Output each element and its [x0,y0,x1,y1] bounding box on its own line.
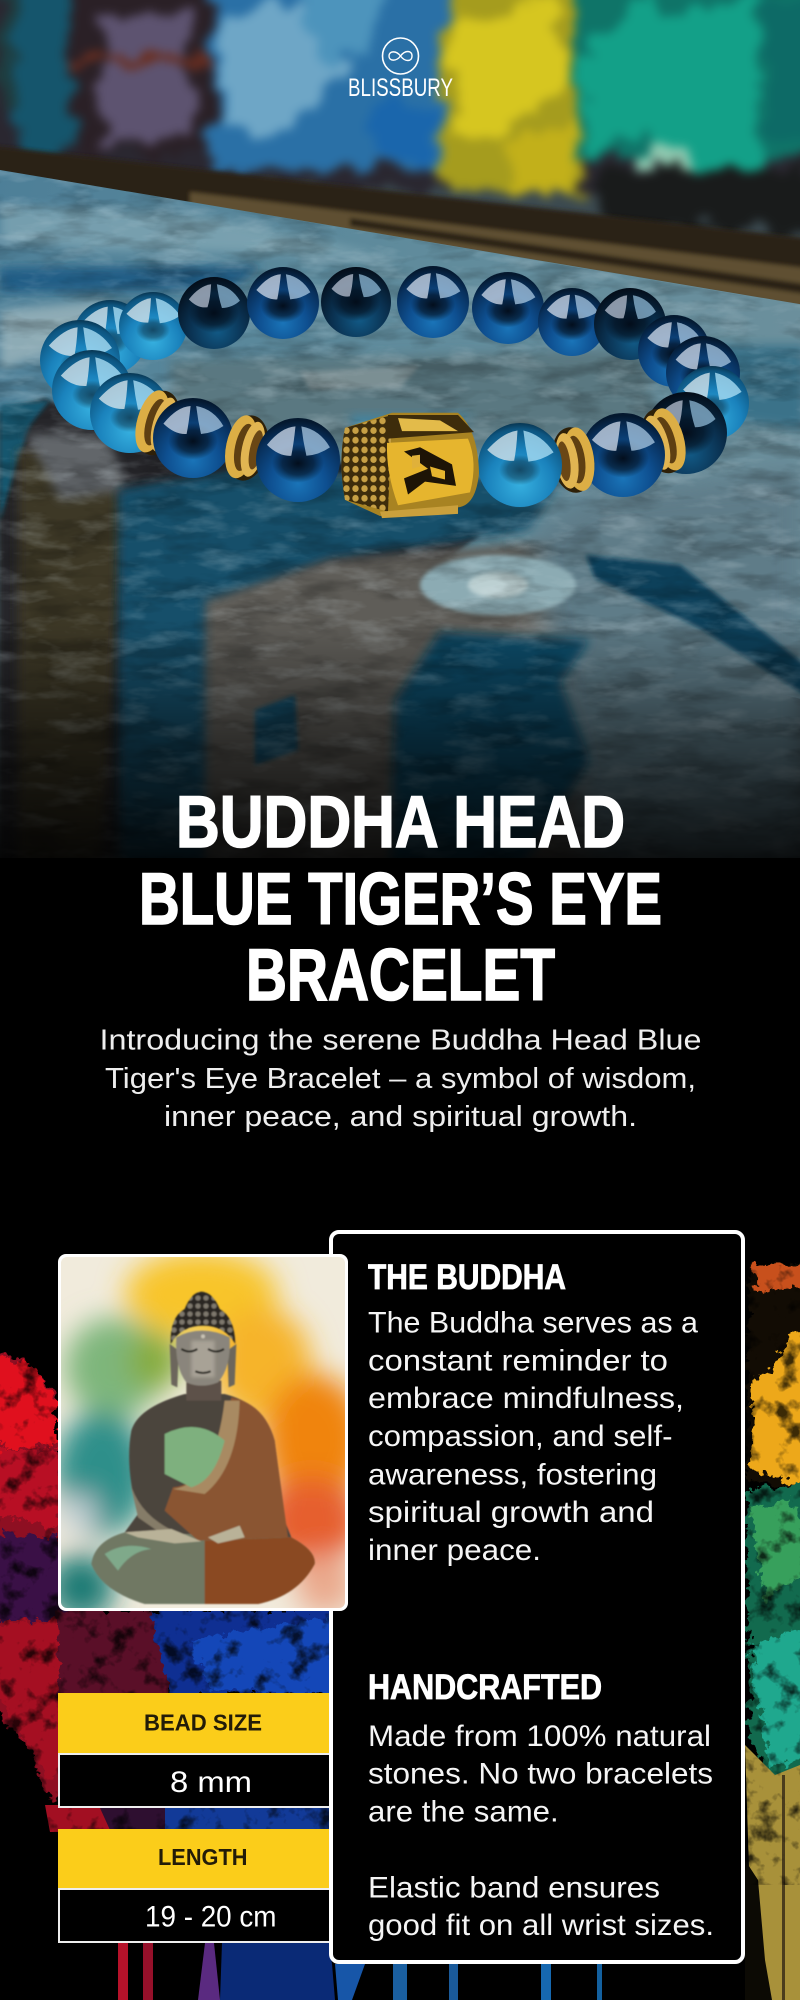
intro text: inner peace, and spiritual growth. [164,1101,637,1133]
paint drips: right yellow [745,1745,800,2000]
spec table: bead size: 8 mm [170,1766,252,1799]
text: Buddha description: constant reminder to [368,1344,668,1378]
text: Buddha description [368,1306,698,1567]
rail ledge [0,146,800,312]
value: 8 mm [59,1754,329,1807]
spec table: bead size [58,1693,329,1807]
heading: the Buddha: THE BUDDHA [368,1258,566,1297]
spec table: length: LENGTH [158,1844,248,1870]
intro text: Introducing the serene Buddha Head Blue [100,1024,702,1056]
heading: handcrafted: HANDCRAFTED [368,1668,602,1707]
bracelet [40,266,749,518]
text: Buddha description: The Buddha serves as a [368,1306,698,1340]
icon: infinity in circle [382,38,418,74]
paint drips: bottom [118,1943,602,2000]
text: Buddha description: awareness, fostering [368,1458,657,1492]
logo [348,38,453,102]
front row of beads and gold spacers [129,385,727,507]
text: handcrafted description: Elastic band ensures [368,1872,660,1904]
watercolor washes [61,1257,345,1608]
concrete front face and paint patches [0,398,800,880]
hero photo: bracelet on painted concrete [0,0,800,880]
title: BRACELET [246,935,555,1016]
text: Buddha description: spiritual growth and [368,1496,654,1529]
text: Buddha description: compassion, and self- [368,1420,672,1453]
label: bead size [58,1693,329,1753]
wordmark: BLISSBURY [348,74,453,102]
intro text: Tiger's Eye Bracelet – a symbol of wisdom, [105,1063,696,1095]
text: Buddha description: inner peace. [368,1534,541,1567]
panel: Buddha watercolor painting [58,1254,348,1611]
panel: info card [331,1232,743,1962]
concrete texture [0,170,800,860]
paint splash: left red and blue [0,1348,90,1800]
intro text [100,1024,702,1133]
concrete top surface [0,170,800,700]
value: 19 - 20 cm [59,1889,329,1942]
spec table: bead size: BEAD SIZE [144,1710,262,1736]
spec table: length [58,1829,329,1942]
title: BLUE TIGER’S EYE [139,859,662,940]
title [139,782,662,1016]
bottom fade to black [0,620,800,860]
text: handcrafted description: are the same. [368,1796,559,1828]
text: handcrafted description: Made from 100% natural [368,1720,711,1753]
graffiti wall [0,0,800,230]
back row of beads [40,266,749,453]
seated Buddha figure [91,1292,315,1604]
paint splash: right orange and green [745,1262,800,1780]
text: handcrafted description: good fit on all wrist sizes. [368,1909,714,1942]
gold Buddha head bead [342,413,479,518]
paint splash: blue behind spec table [45,1610,340,1832]
label: length [58,1829,329,1888]
spec table: length: 19 - 20 cm [145,1900,276,1934]
text: handcrafted description [368,1720,714,1942]
text: Buddha description: embrace mindfulness, [368,1382,684,1415]
text: handcrafted description: stones. No two bracelets [368,1758,713,1790]
title: BUDDHA HEAD [176,782,625,863]
paint mottling [0,1265,800,1885]
